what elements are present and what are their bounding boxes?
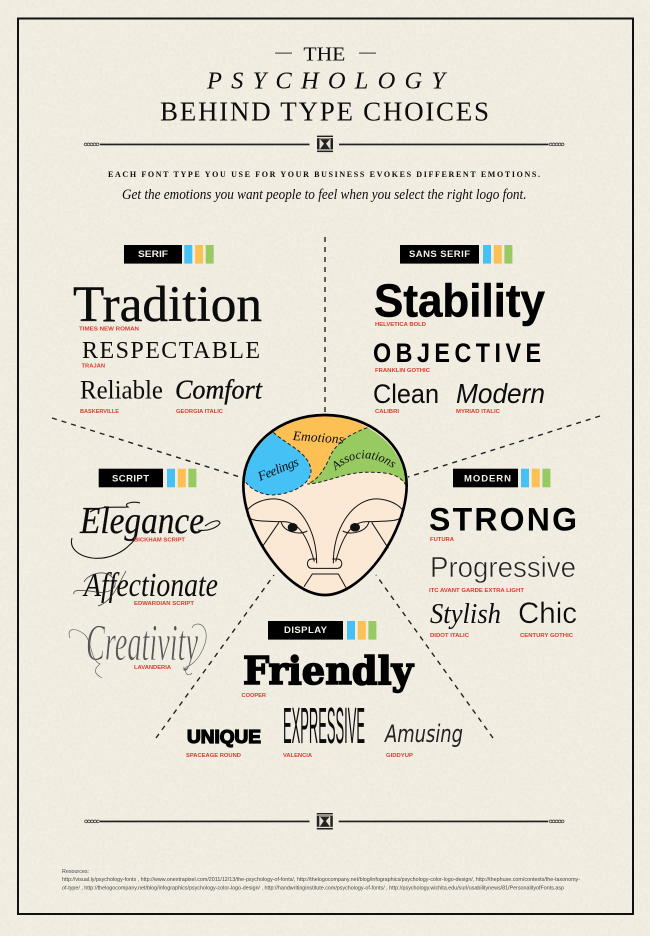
Affectionate sample: EDWARDIAN SCRIPT bbox=[134, 601, 195, 607]
panel: serif: TRAJAN bbox=[82, 364, 105, 370]
Objective sample: OBJECTIVE bbox=[373, 339, 541, 368]
title: THE bbox=[303, 44, 345, 66]
panel: display: COOPER bbox=[242, 693, 266, 699]
brain region: feelings bbox=[244, 432, 311, 495]
display label: DISPLAY bbox=[284, 625, 328, 636]
face lines bbox=[247, 499, 403, 588]
region labels: Associations bbox=[334, 450, 396, 471]
brain region: associations bbox=[307, 428, 406, 485]
Strong sample: STRONG bbox=[429, 502, 577, 538]
panel: modern: DIDOT ITALIC bbox=[430, 633, 469, 639]
modern label bbox=[453, 469, 550, 487]
Clean sample: Clean bbox=[373, 379, 439, 409]
intro text: EACH FONT TYPE YOU USE FOR YOUR BUSINESS EVOKES DIFFERENT EMOTIONS. bbox=[108, 170, 540, 179]
title: BEHIND TYPE CHOICES bbox=[160, 97, 489, 127]
panel: serif: TIMES NEW ROMAN bbox=[79, 327, 139, 333]
Friendly sample: Friendly bbox=[243, 648, 414, 693]
serif label: SERIF bbox=[138, 249, 168, 260]
panel: modern: ITC AVANT GARDE EXTRA LIGHT bbox=[429, 588, 525, 594]
resources text: of-type/ , http://thelogocompany.net/blog/infographics/psychology-color-logo-design/ , http://handwritinginstitute.com/psychology-of-fonts/ , http://psychology.wichita.edu/surl/usabilitynews/81/PersonalityofFonts.asp bbox=[62, 885, 564, 891]
panel: serif: BASKERVILLE bbox=[80, 409, 119, 415]
Tradition sample: Tradition bbox=[73, 277, 262, 333]
region labels: Feelings bbox=[255, 454, 301, 484]
Elegance sample: BICKHAM SCRIPT bbox=[134, 538, 186, 544]
Creativity sample: Creativity bbox=[86, 615, 198, 672]
Progressive sample: Progressive bbox=[430, 552, 576, 584]
panel: sans serif: MYRIAD ITALIC bbox=[456, 409, 500, 415]
Chic sample: Chic bbox=[518, 597, 577, 630]
panel: sans serif: CALIBRI bbox=[375, 409, 399, 415]
intro text: Get the emotions you want people to feel when you select the right logo font. bbox=[122, 187, 526, 203]
script label bbox=[99, 469, 196, 487]
intro text bbox=[108, 170, 540, 203]
Creativity sample: LAVANDERIA bbox=[134, 665, 171, 671]
Amusing sample: Amusing bbox=[384, 720, 463, 748]
sans serif label bbox=[400, 245, 512, 264]
Reliable sample: Reliable bbox=[80, 376, 163, 405]
Unique sample: UNIQUE bbox=[187, 727, 261, 747]
top ornamental divider bbox=[84, 136, 564, 152]
head illustration bbox=[242, 414, 408, 596]
script label: SCRIPT bbox=[112, 474, 149, 484]
display label bbox=[268, 621, 376, 640]
panel: display bbox=[186, 621, 463, 759]
region labels: Emotions bbox=[291, 428, 344, 447]
Creativity sample bbox=[69, 615, 206, 678]
Elegance sample: Elegance bbox=[79, 500, 204, 542]
bottom ornamental divider bbox=[85, 813, 564, 830]
title bbox=[160, 44, 489, 127]
panel: modern bbox=[429, 469, 577, 639]
panel: modern: CENTURY GOTHIC bbox=[520, 633, 573, 639]
serif label bbox=[124, 245, 214, 264]
Stability sample: Stability bbox=[374, 275, 545, 327]
panel: display: GIDDYUP bbox=[386, 753, 413, 759]
panel: script bbox=[69, 469, 220, 678]
sans serif label: SANS SERIF bbox=[409, 249, 470, 260]
title: PSYCHOLOGY bbox=[206, 68, 447, 95]
region labels bbox=[255, 428, 396, 484]
Affectionate sample: Affectionate bbox=[82, 567, 218, 604]
panel: modern: FUTURA bbox=[430, 537, 454, 543]
Stylish sample: Stylish bbox=[430, 598, 501, 630]
resources text: Resources: bbox=[62, 869, 89, 875]
panel: display: SPACEAGE ROUND bbox=[186, 753, 241, 759]
resources text: http://visual.ly/psychology-fonts , http://www.onextrapixel.com/2011/12/13/the-psychology-of-fonts/, http://thelogocompany.net/blog/infographics/psychology-color-logo-design/, http://thephuse.com/contests/the-taxonomy- bbox=[62, 877, 580, 883]
Elegance sample bbox=[71, 500, 220, 558]
modern label: MODERN bbox=[464, 474, 511, 484]
panel: display: VALENCIA bbox=[283, 753, 312, 759]
panel: serif: GEORGIA ITALIC bbox=[176, 409, 223, 415]
Comfort sample: Comfort bbox=[175, 375, 263, 405]
resources text bbox=[62, 869, 580, 891]
panel: sans serif: FRANKLIN GOTHIC bbox=[375, 368, 430, 374]
panel: sans serif: HELVETICA BOLD bbox=[375, 322, 426, 328]
panel: sans serif bbox=[373, 245, 545, 415]
Modern sample: Modern bbox=[456, 378, 545, 409]
panel: serif bbox=[73, 245, 263, 415]
Respectable sample: RESPECTABLE bbox=[82, 338, 260, 364]
brain region: emotions bbox=[273, 416, 367, 484]
dashed section dividers bbox=[52, 237, 600, 738]
panel: display: EXPRESSIVE bbox=[283, 697, 365, 754]
